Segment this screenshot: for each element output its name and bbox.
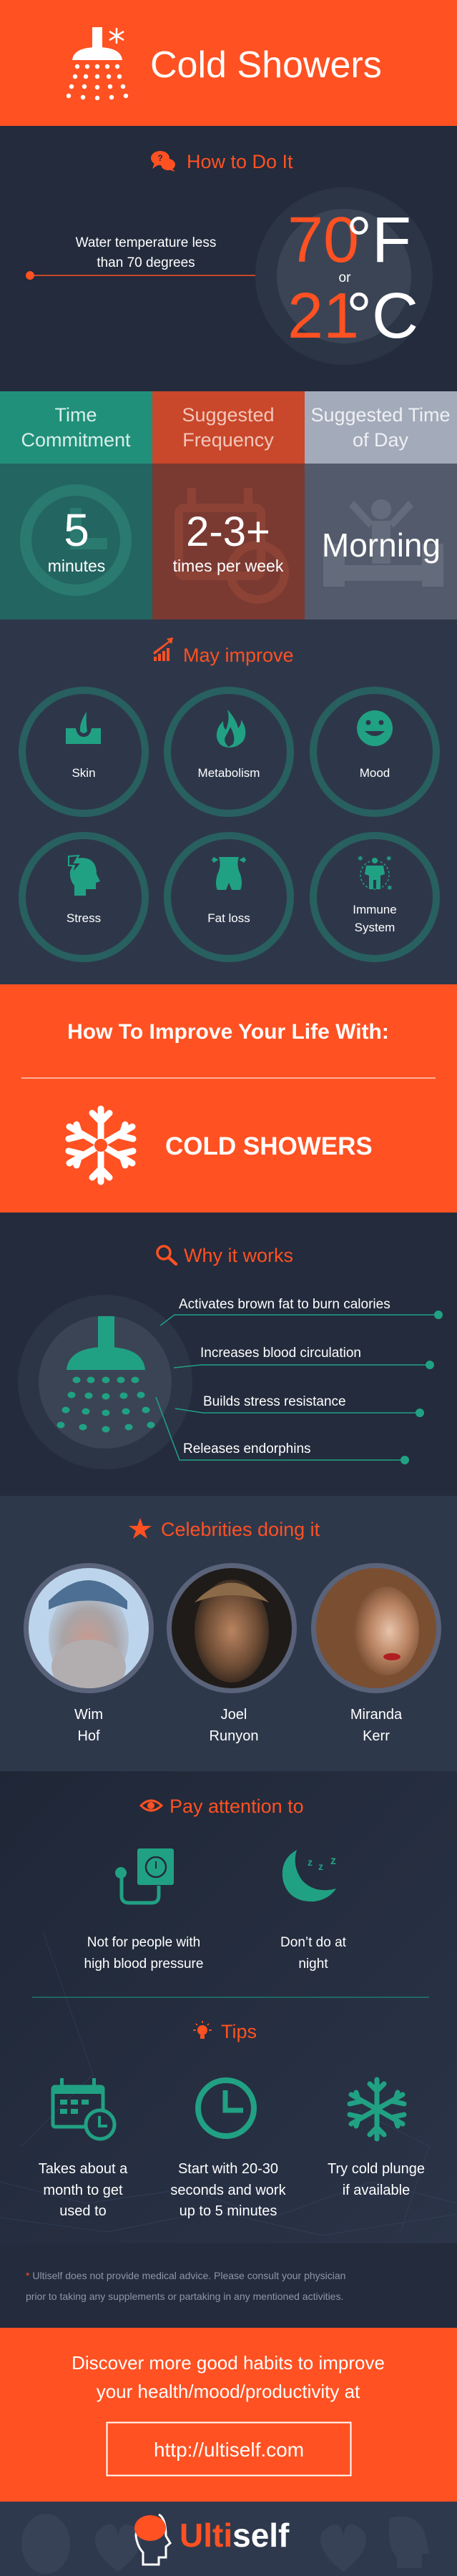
temperature circle: °C <box>346 280 418 352</box>
panel: may improve <box>0 619 457 984</box>
panel: time commitment: Time <box>54 404 97 426</box>
panel: suggested frequency: 2-3+ <box>186 509 270 555</box>
icon: clock watermark <box>26 490 126 590</box>
disclaimer: * Ultiself does not provide medical advice. Please consult your physician <box>26 2270 345 2281</box>
list: benefits: Increases blood circulation <box>200 1346 361 1361</box>
text block: water temperature: Water temperature less <box>76 235 216 250</box>
text: warnings <box>84 1935 347 1972</box>
panel: suggested time of day: Suggested Time <box>310 404 451 426</box>
text: tips: Start with 20-30 <box>178 2161 278 2177</box>
text: tips: used to <box>59 2203 107 2219</box>
banner: how to improve your life: COLD SHOWERS <box>165 1132 373 1160</box>
banner: how to improve your life: How To Improve Your Life With: <box>67 1020 389 1044</box>
item: fat loss <box>167 836 290 959</box>
panel: why it works <box>0 1213 457 1496</box>
item: immune system: System <box>355 921 395 934</box>
panel: time commitment: minutes <box>48 557 105 575</box>
panel: suggested frequency: Suggested <box>182 404 275 426</box>
names: Kerr <box>363 1728 390 1744</box>
icon: moon zzz: z <box>318 1861 323 1872</box>
icon: snowflake <box>350 2080 404 2139</box>
heading: tips: Tips <box>221 2021 257 2042</box>
text: tips: if available <box>343 2183 410 2198</box>
temperature circle <box>255 187 433 365</box>
names: Wim <box>74 1707 103 1723</box>
item: metabolism: Metabolism <box>198 766 260 780</box>
icon: moon zzz <box>282 1850 336 1901</box>
item: mood: Mood <box>360 766 390 780</box>
icon: clock <box>198 2080 254 2136</box>
heading: pay attention to: Pay attention to <box>169 1796 304 1817</box>
item: skin: Skin <box>72 766 96 780</box>
url box <box>107 2422 350 2475</box>
text: warnings: Not for people with <box>87 1935 200 1950</box>
text: tips: seconds and work <box>170 2183 287 2198</box>
item: immune system: ✱ <box>358 855 363 862</box>
panel: suggested frequency: times per week <box>173 557 284 575</box>
icon: shower with snowflake <box>67 27 128 100</box>
panel: time commitment <box>0 391 152 619</box>
heading: how to do it: ? <box>157 153 163 163</box>
header <box>0 0 457 126</box>
item: immune system: Immune <box>353 903 397 916</box>
panel: pay attention and tips <box>0 1771 457 2243</box>
text: tips <box>39 2161 425 2219</box>
icon: snowflake <box>69 1109 133 1182</box>
call to action: your health/mood/productivity at <box>97 2381 360 2402</box>
text block: water temperature: than 70 degrees <box>97 255 195 270</box>
text: warnings: Don’t do at <box>280 1935 347 1950</box>
disclaimer: prior to taking any supplements or partaking in any mentioned activities. <box>26 2291 343 2302</box>
icon: shower in circle <box>18 1295 192 1469</box>
text: tips: Try cold plunge <box>328 2161 425 2177</box>
panel: time commitment: Commitment <box>21 429 131 451</box>
heading: tips <box>193 2021 257 2042</box>
temperature circle: °F <box>346 205 411 276</box>
panel: suggested frequency: Frequency <box>182 429 274 451</box>
panel: how to do it <box>0 126 457 391</box>
icon: brain head <box>134 2514 170 2565</box>
text: tips: up to 5 minutes <box>180 2203 277 2219</box>
item: stress <box>22 836 145 959</box>
heading: why it works: Why it works <box>184 1245 293 1266</box>
item: immune system: ✱ <box>387 884 393 891</box>
panel: celebrities <box>0 1496 457 1771</box>
temperature circle: or <box>339 270 351 285</box>
text: warnings: night <box>298 1957 328 1972</box>
portrait: miranda kerr <box>308 1559 443 1695</box>
icon: person waking watermark <box>323 499 443 587</box>
temperature circle: 21 <box>288 280 359 352</box>
heading: may improve: May improve <box>183 645 294 666</box>
text block: water temperature <box>26 235 276 280</box>
names <box>74 1707 403 1744</box>
icon: blood pressure monitor <box>115 1848 174 1903</box>
icon: moon zzz: z <box>308 1856 313 1868</box>
list: benefits: Builds stress resistance <box>203 1394 346 1409</box>
list: benefits: Activates brown fat to burn calories <box>179 1297 390 1312</box>
footer: ultiself logo: Ultiself <box>180 2517 290 2554</box>
icon: calendar watermark <box>179 488 285 599</box>
banner: how to improve your life <box>0 984 457 1213</box>
portrait: wim hof <box>21 1559 157 1695</box>
text: tips: month to get <box>43 2183 123 2198</box>
text: tips: Takes about a <box>39 2161 128 2177</box>
item: skin <box>22 690 145 813</box>
text: warnings: high blood pressure <box>84 1957 203 1972</box>
panel: suggested frequency <box>152 391 305 619</box>
names: Hof <box>77 1728 100 1744</box>
heading: may improve <box>153 637 294 666</box>
item: metabolism <box>167 690 290 813</box>
icon: moon zzz: z <box>330 1855 336 1867</box>
list: benefits <box>156 1297 443 1464</box>
item: immune system: ✱ <box>386 855 392 862</box>
item: fat loss: Fat loss <box>207 911 250 925</box>
item: immune system <box>313 836 436 959</box>
panel: time commitment: 5 <box>64 504 89 556</box>
list: benefits: Releases endorphins <box>183 1441 311 1456</box>
disclaimer <box>0 2243 457 2328</box>
url box: http://ultiself.com <box>154 2439 304 2461</box>
call to action <box>0 2328 457 2502</box>
heading: celebrities doing it: Celebrities doing it <box>161 1519 320 1540</box>
call to action: Discover more good habits to improve <box>72 2352 385 2374</box>
icon: calendar clock <box>53 2078 114 2139</box>
temperature circle: 70 <box>288 205 359 276</box>
item: stress: Stress <box>67 911 101 925</box>
heading: how to do it: How to Do It <box>187 151 293 172</box>
panel: suggested time of day: of Day <box>353 429 409 451</box>
names: Miranda <box>350 1707 403 1723</box>
footer: ultiself logo <box>0 2502 457 2576</box>
panel: suggested time of day <box>305 391 457 619</box>
portrait: joel runyon <box>164 1559 300 1695</box>
item: mood <box>313 690 436 813</box>
panel: suggested time of day: Morning <box>322 527 441 564</box>
names: Runyon <box>210 1728 258 1744</box>
names: Joel <box>221 1707 247 1723</box>
title: Cold Showers <box>150 44 382 86</box>
